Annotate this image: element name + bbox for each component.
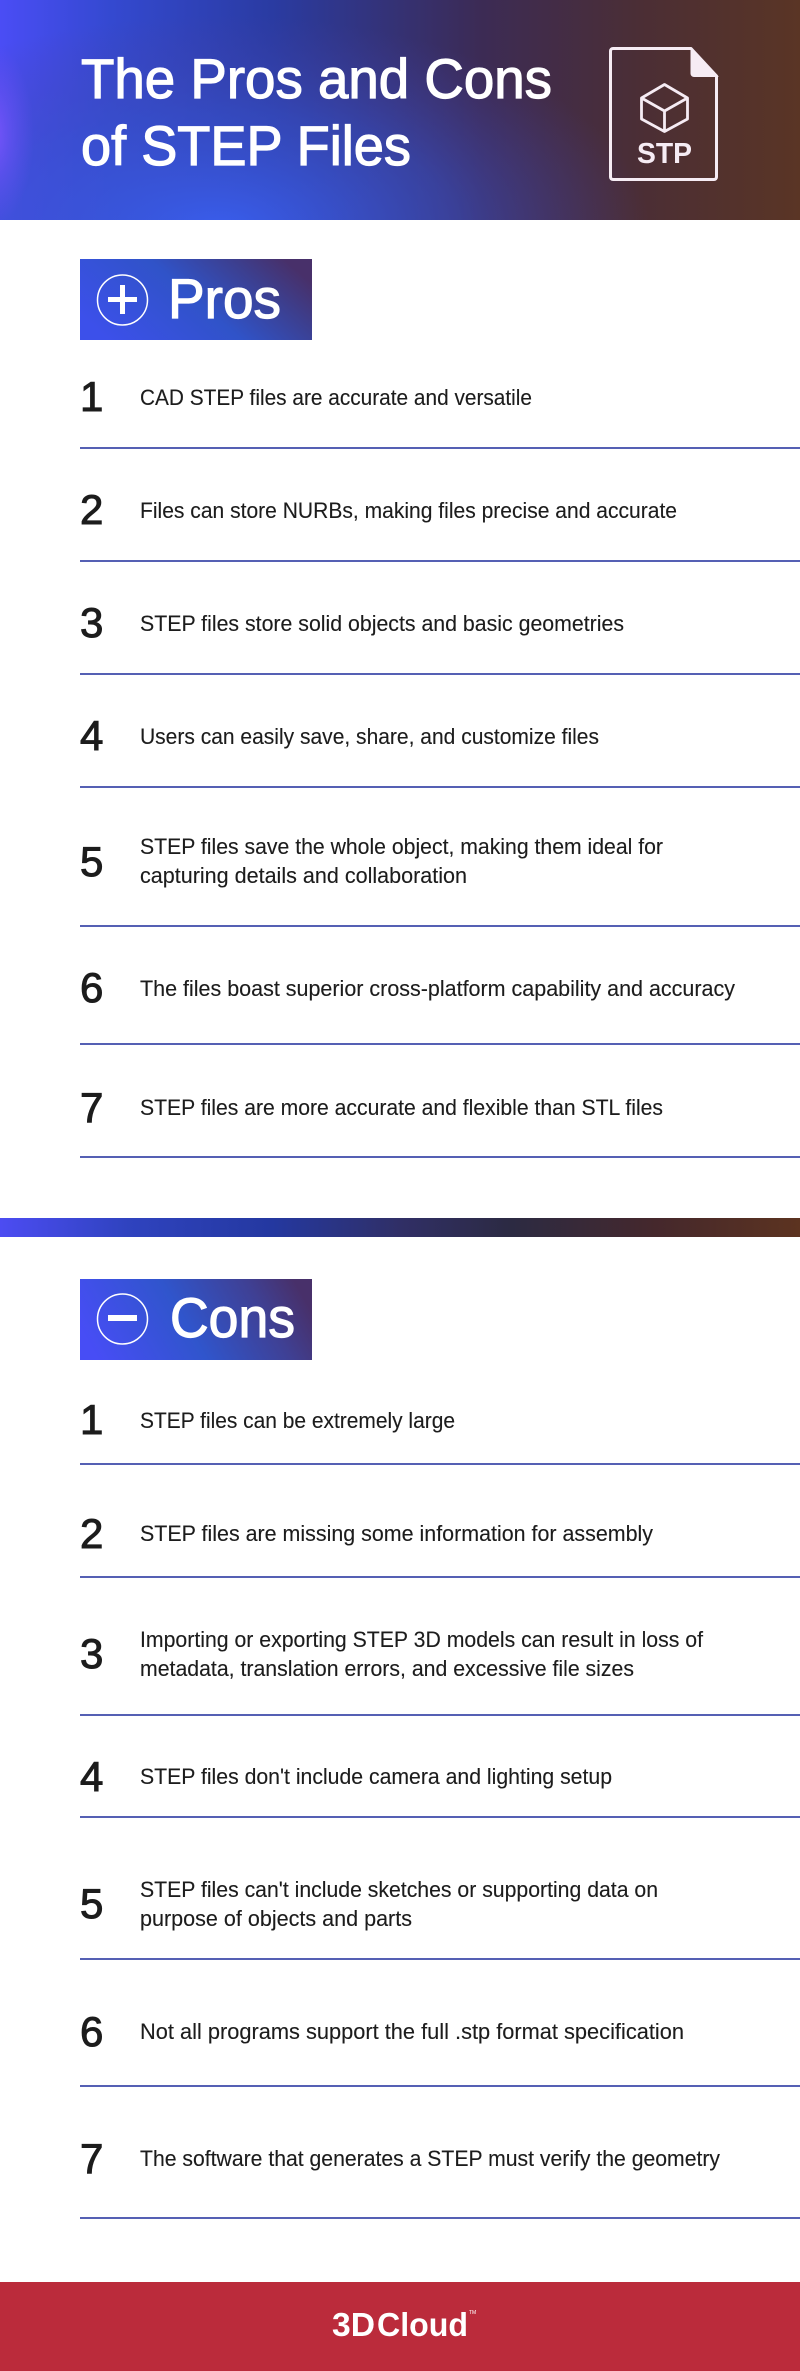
con 7: 7 (80, 2135, 103, 2182)
footer (0, 2282, 800, 2371)
logo: 3DCloud: TM (469, 2310, 476, 2316)
pro 5: capturing details and collaboration (140, 863, 467, 888)
pro 3: STEP files store solid objects and basic geometries (140, 611, 624, 636)
logo: 3DCloud (332, 2306, 476, 2343)
pro 6 (80, 964, 800, 1045)
con 3: metadata, translation errors, and excessive file sizes (140, 1656, 634, 1681)
con 1 (80, 1396, 800, 1465)
pro 5: STEP files save the whole object, making them ideal for (140, 834, 663, 859)
pro 5 (80, 834, 800, 927)
title: The Pros and Cons (81, 47, 552, 110)
pro 5: 5 (80, 838, 103, 885)
pro 1: CAD STEP files are accurate and versatile (140, 385, 532, 410)
pro 3 (80, 599, 800, 675)
con 7: The software that generates a STEP must verify the geometry (140, 2146, 721, 2171)
logo: 3DCloud: Cloud (377, 2306, 468, 2343)
pro 4: Users can easily save, share, and customize files (140, 724, 599, 749)
con 4 (80, 1753, 800, 1818)
con 1: 1 (80, 1396, 103, 1443)
con 2 (80, 1510, 800, 1578)
con 7 (80, 2135, 800, 2219)
pro 4 (80, 712, 800, 788)
pro 7: STEP files are more accurate and flexible than STL files (140, 1095, 663, 1120)
con 5 (80, 1877, 800, 1960)
pro 2: Files can store NURBs, making files precise and accurate (140, 498, 677, 523)
heading: pros badge (80, 259, 312, 340)
pro 6: The files boast superior cross-platform capability and accuracy (140, 976, 736, 1001)
con 1: STEP files can be extremely large (140, 1408, 455, 1433)
pro 2: 2 (80, 486, 103, 533)
pro 2 (80, 486, 800, 562)
con 5: 5 (80, 1880, 103, 1927)
con 4: STEP files don't include camera and lighting setup (140, 1764, 612, 1789)
con 6 (80, 2008, 800, 2087)
pro 4: 4 (80, 712, 103, 759)
con 2: STEP files are missing some information for assembly (140, 1521, 654, 1546)
title (81, 47, 552, 177)
heading: cons badge: Cons (170, 1286, 295, 1349)
logo: 3DCloud: 3D (332, 2306, 375, 2343)
con 2: 2 (80, 1510, 103, 1557)
title: of STEP Files (81, 114, 411, 177)
con 6: 6 (80, 2008, 103, 2055)
heading: pros badge: Pros (168, 267, 281, 330)
pro 1: 1 (80, 373, 103, 420)
icon: STP file (610, 48, 718, 180)
pro 7: 7 (80, 1084, 103, 1131)
con 6: Not all programs support the full .stp format specification (140, 2019, 684, 2044)
heading: cons badge (80, 1279, 312, 1360)
con 5: STEP files can't include sketches or supporting data on (140, 1877, 658, 1902)
pro 7 (80, 1084, 800, 1158)
con 3 (80, 1627, 800, 1716)
pro 3: 3 (80, 599, 103, 646)
con 3: 3 (80, 1630, 103, 1677)
icon: STP file: STP (637, 138, 692, 170)
con 4: 4 (80, 1753, 103, 1800)
panel: cons (80, 1279, 800, 2219)
con 3: Importing or exporting STEP 3D models can result in loss of (140, 1627, 704, 1652)
section divider bar (0, 1218, 800, 1237)
header banner (0, 0, 800, 220)
pro 1 (80, 373, 800, 449)
con 5: purpose of objects and parts (140, 1906, 412, 1931)
panel: pros (80, 259, 800, 1158)
pro 6: 6 (80, 964, 103, 1011)
